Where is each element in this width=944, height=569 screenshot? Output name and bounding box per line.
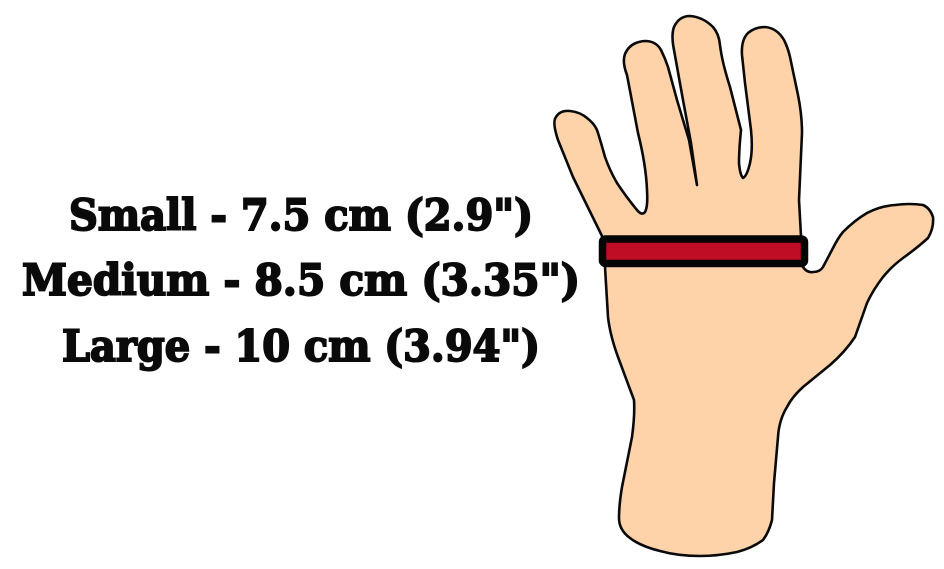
label: small: Small - 7.5 cm (2.9") [69,191,533,241]
icon: hand with wrist band [554,16,933,556]
size labels [22,191,580,372]
hand outline [554,16,933,556]
wrist band [602,239,804,264]
label: large: Large - 10 cm (3.94") [62,322,540,372]
label: medium: Medium - 8.5 cm (3.35") [22,256,580,306]
